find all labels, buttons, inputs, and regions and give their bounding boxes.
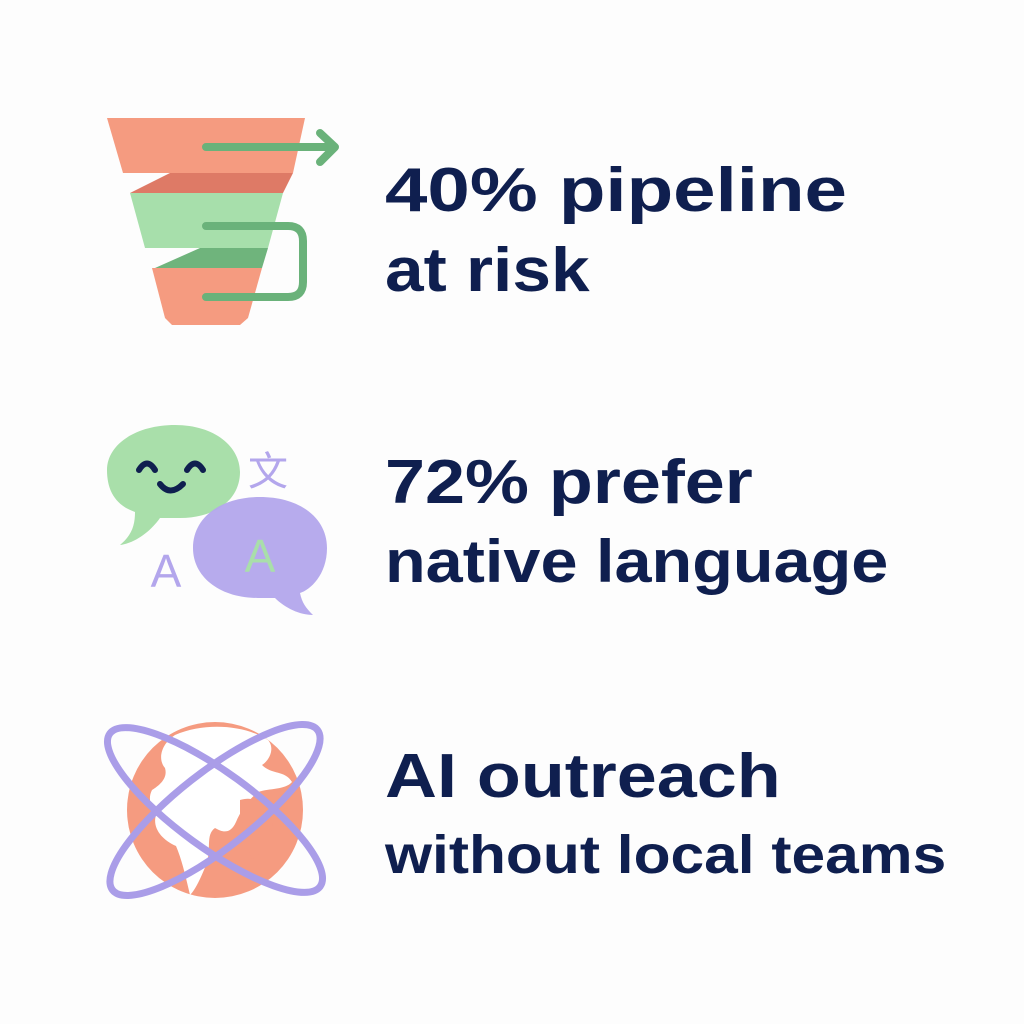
heading: native language: native language bbox=[385, 528, 888, 595]
heading: 40% pipeline: 40% pipeline bbox=[385, 156, 847, 225]
heading: 72% prefer: 72% prefer bbox=[385, 448, 753, 517]
icon: translation chat bubbles: 文 bbox=[248, 439, 288, 497]
icon: funnel bbox=[107, 118, 335, 325]
icon: translation chat bubbles: A bbox=[245, 530, 276, 582]
subheading: without local teams: without local teams bbox=[385, 825, 946, 885]
heading: AI outreach: AI outreach bbox=[385, 742, 781, 811]
heading: at risk: at risk bbox=[385, 236, 590, 305]
icon: globe with orbits bbox=[87, 700, 343, 920]
icon: translation chat bubbles: A bbox=[151, 545, 182, 597]
icon: translation chat bubbles bbox=[107, 425, 327, 615]
